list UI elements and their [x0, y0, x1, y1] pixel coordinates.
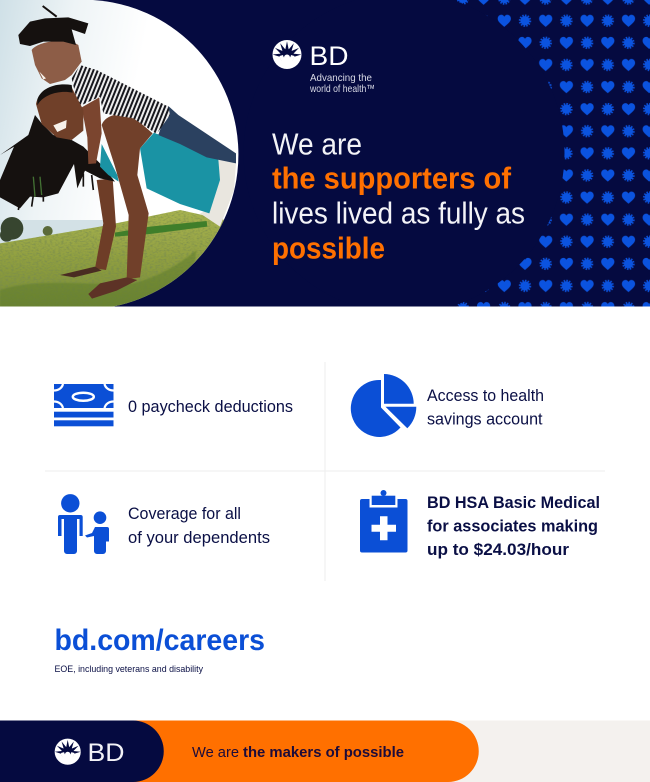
footer tagline: the makers of possible — [243, 744, 404, 761]
photo: woman doing a push-up with child on her back — [0, 0, 240, 310]
benefit: health savings account: Access to health — [427, 386, 544, 405]
icon: adult and child — [58, 494, 109, 554]
navy pill — [0, 720, 164, 782]
hero banner — [0, 0, 650, 314]
footer tagline: We are — [192, 744, 239, 761]
child's arm — [82, 97, 102, 164]
jeans — [158, 106, 236, 163]
BD logo with tagline — [272, 40, 375, 95]
benefit: coverage for dependents — [58, 494, 270, 554]
headline: the supporters of — [272, 162, 512, 196]
benefit: paycheck deductions: 0 paycheck deductions — [128, 397, 293, 416]
dark circle masking the pattern — [415, 0, 564, 306]
benefit: paycheck deductions — [54, 384, 293, 426]
benefit: health savings account — [351, 374, 544, 437]
benefit: BD HSA Basic Medical — [360, 490, 600, 559]
benefit: health savings account: savings account — [427, 410, 543, 428]
woman's head — [36, 84, 83, 140]
orange pill — [100, 720, 479, 782]
careers link and EOE note: bd.com/careers — [54, 624, 265, 657]
footer BD logo — [55, 739, 124, 767]
headline: We are — [272, 126, 362, 162]
BD logo with tagline: Advancing the — [310, 72, 372, 84]
BD logo with tagline: world of health™ — [309, 83, 375, 95]
child's striped shirt — [72, 65, 170, 134]
benefits grid — [45, 362, 605, 581]
icon: banknotes — [54, 384, 114, 426]
benefit: BD HSA Basic Medical: up to $24.03/hour — [427, 540, 569, 559]
benefit: coverage for dependents: of your dependents — [128, 528, 270, 547]
careers link and EOE note — [54, 624, 265, 675]
distant sea — [0, 220, 107, 243]
far arm — [95, 178, 116, 270]
BD logo with tagline: BD — [310, 41, 348, 71]
child's head — [18, 6, 88, 84]
footer BD logo: BD — [88, 739, 124, 767]
white trousers — [200, 159, 236, 227]
headline: possible — [272, 232, 385, 266]
benefit: coverage for dependents: Coverage for all — [128, 504, 241, 523]
benefit: BD HSA Basic Medical: for associates making — [427, 516, 598, 536]
logo mark — [55, 739, 81, 765]
pattern of blue hearts and suns — [456, 0, 650, 306]
benefit: BD HSA Basic Medical: BD HSA Basic Medical — [427, 493, 600, 512]
icon: pie chart — [351, 374, 416, 437]
headline — [272, 126, 525, 266]
woman's torso and near arm — [102, 114, 153, 279]
careers link and EOE note: EOE, including veterans and disability — [54, 664, 203, 675]
icon: medical clipboard — [360, 490, 408, 552]
grass — [0, 210, 240, 310]
footer band — [0, 720, 650, 782]
teal top — [100, 133, 220, 213]
trees — [0, 217, 53, 242]
headline: lives lived as fully as — [272, 196, 525, 230]
woman's hair — [0, 115, 115, 210]
logo mark — [272, 40, 302, 69]
